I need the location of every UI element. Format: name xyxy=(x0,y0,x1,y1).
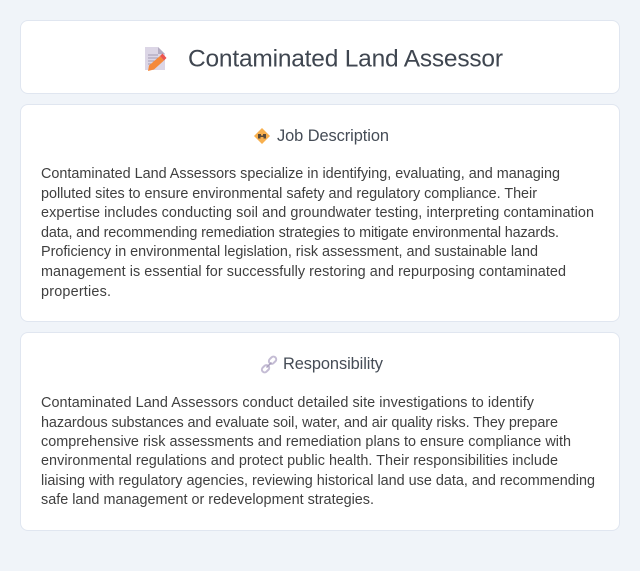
responsibility text: environmental regulations and protect public health. Their responsibilities include xyxy=(41,453,558,469)
job description text: management is essential for successfully restoring and repurposing contaminated xyxy=(41,264,566,280)
panel: title card xyxy=(20,20,620,94)
responsibility text: hazardous substances and evaluate soil, water, and air quality risks. They prepare xyxy=(41,415,558,431)
icon: document with pencil xyxy=(145,47,166,71)
title: Contaminated Land Assessor xyxy=(188,46,503,72)
responsibility text: safe land management or redevelopment strategies. xyxy=(41,492,374,508)
responsibility text: Contaminated Land Assessors conduct detailed site investigations to identify xyxy=(41,395,535,411)
responsibility text: liaising with regulatory agencies, reviewing historical land use data, and recommending xyxy=(41,473,595,489)
heading: job description: Job Description xyxy=(277,127,389,145)
job description text: expertise includes conducting soil and groundwater testing, interpreting contamination xyxy=(41,205,594,221)
responsibility text xyxy=(41,395,595,508)
icon: chain link xyxy=(260,356,278,374)
job description text: Proficiency in environmental legislation, risk assessment, and sustainable land xyxy=(41,244,538,260)
panel: responsibility xyxy=(20,332,620,531)
job description text: properties. xyxy=(41,284,111,300)
panel: job description xyxy=(20,104,620,322)
job description text: data, and recommending remediation strategies to mitigate environmental hazards. xyxy=(41,225,559,241)
responsibility text: comprehensive risk assessments and remediation plans to ensure compliance with xyxy=(41,434,571,450)
job description text: polluted sites to ensure environmental safety and regulatory compliance. Their xyxy=(41,186,537,202)
icon: warning diamond xyxy=(254,128,270,144)
heading: responsibility: Responsibility xyxy=(283,355,384,373)
job description text: Contaminated Land Assessors specialize in identifying, evaluating, and managing xyxy=(41,166,560,182)
job description text xyxy=(41,166,594,300)
